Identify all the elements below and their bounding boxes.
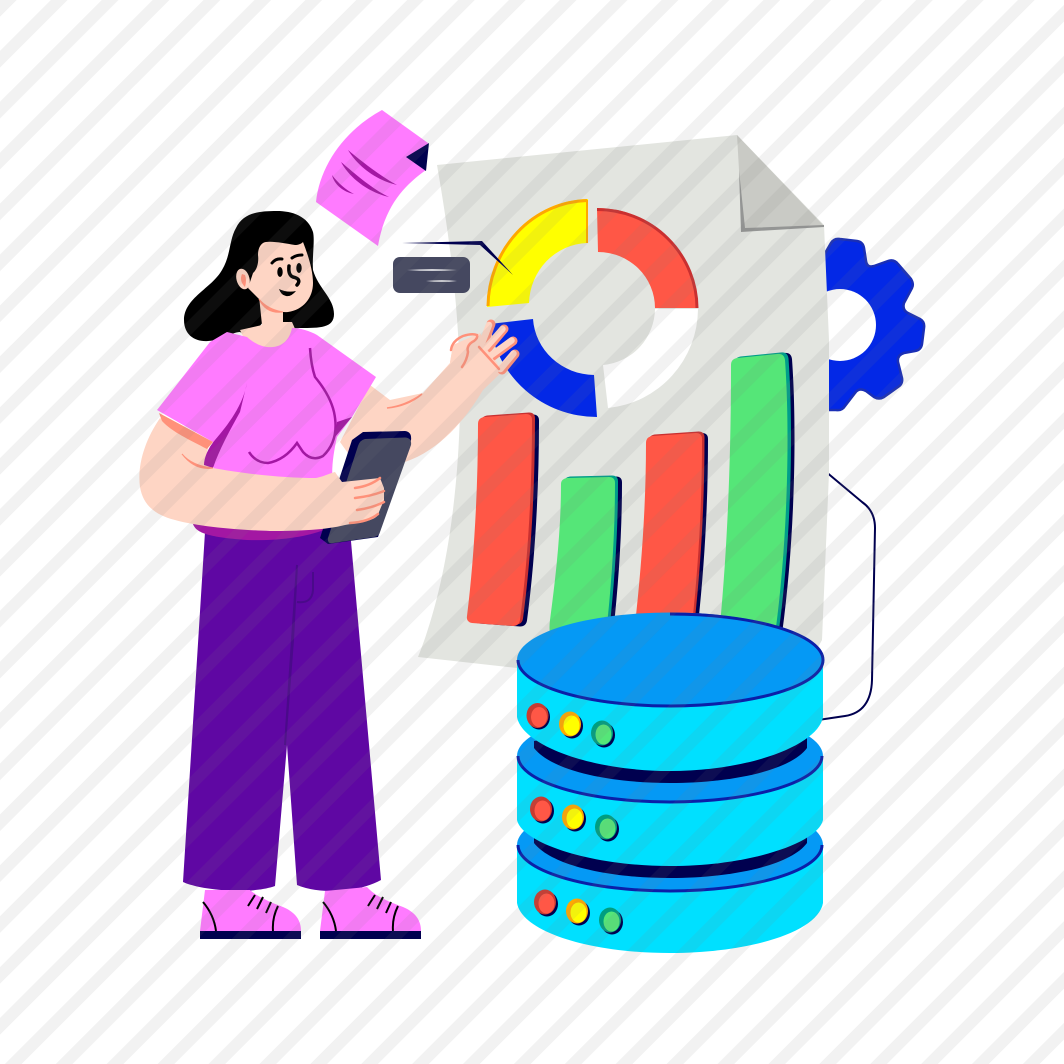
- left shoe: [200, 890, 301, 939]
- bar 2 green: [550, 476, 622, 635]
- hair: [184, 211, 334, 341]
- pants: [183, 530, 381, 891]
- tier 3: [517, 798, 823, 953]
- sleeve shadow: [159, 413, 213, 449]
- donut chart: [487, 199, 698, 417]
- shirt hem: [193, 510, 324, 540]
- palm: [450, 334, 500, 390]
- arm crease: [387, 394, 422, 408]
- donut segment: red: [597, 208, 698, 308]
- bar 3 red: [635, 432, 708, 625]
- status lights tier 3: [534, 890, 623, 934]
- donut segment: yellow: [487, 199, 588, 307]
- bar 1 red: [467, 412, 539, 626]
- thumb and palm lines: [451, 334, 499, 369]
- status lights tier 2: [530, 796, 619, 842]
- arm crease: [182, 454, 213, 468]
- hand fingers: [482, 324, 515, 370]
- right arm: [340, 324, 515, 470]
- icon: gear: [804, 239, 924, 410]
- hand fingers: [350, 478, 384, 523]
- neck: [240, 296, 300, 355]
- eyebrows and nose: [272, 255, 302, 263]
- face: [234, 242, 313, 312]
- folded corner: [737, 135, 824, 232]
- ear: [234, 267, 252, 291]
- bar 4 green: [720, 352, 795, 635]
- note lines: [332, 150, 397, 197]
- gap shadow upper: [534, 720, 807, 783]
- callout box: [393, 257, 470, 293]
- callout leader line: [402, 241, 513, 275]
- tier 2: [517, 709, 823, 866]
- donut segment: white: [603, 309, 698, 408]
- note corner: [406, 143, 429, 171]
- right shoe: [320, 887, 421, 939]
- tablet: [320, 431, 411, 544]
- donut segment: blue: [490, 319, 597, 417]
- jaw shadow: [259, 299, 283, 312]
- connector wire: [818, 471, 875, 720]
- panel: report document: [418, 135, 829, 680]
- person: [139, 211, 515, 939]
- gap shadow lower: [534, 815, 807, 878]
- server database stack: [517, 612, 824, 953]
- eyes: [277, 267, 283, 277]
- shirt fold lines: [249, 348, 336, 463]
- shirt: [157, 328, 376, 525]
- tier 1: [517, 612, 824, 771]
- mouth: [279, 289, 296, 296]
- status lights tier 1: [526, 703, 615, 748]
- icon: floating pink note: [316, 110, 429, 246]
- callout: [393, 241, 513, 293]
- left arm: [139, 383, 384, 531]
- bar chart: [467, 352, 795, 635]
- sleeve fold: [204, 383, 247, 468]
